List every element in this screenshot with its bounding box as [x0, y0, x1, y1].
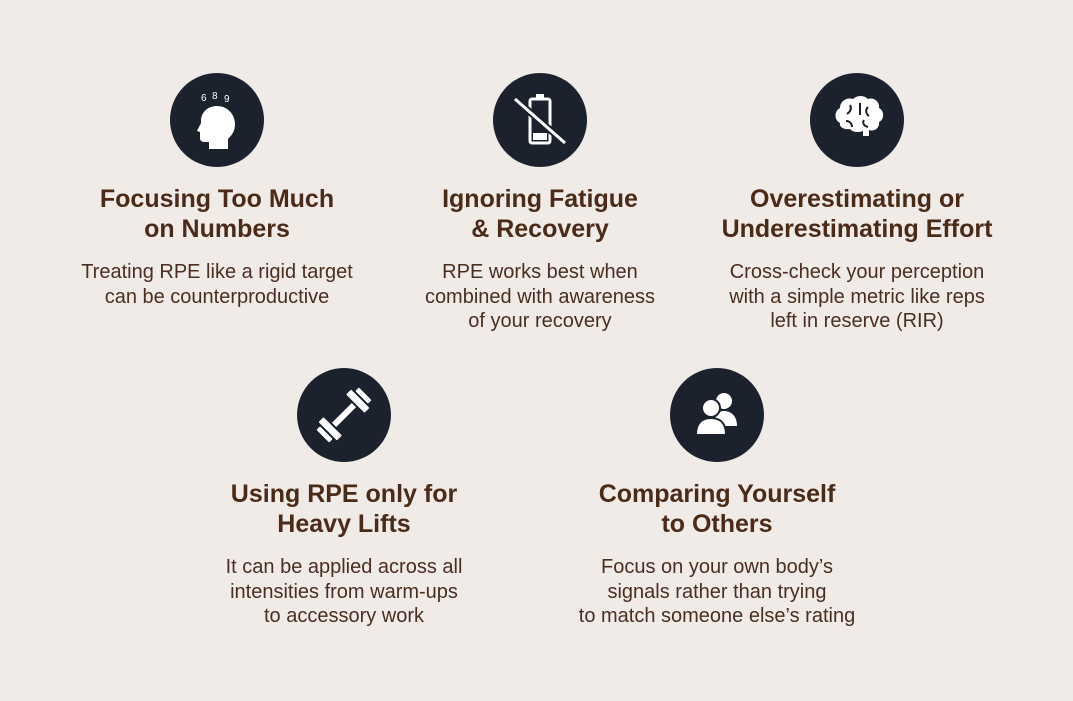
text	[81, 261, 353, 308]
heading: Focusing Too Much	[100, 185, 334, 213]
text: to match someone else’s rating	[579, 605, 855, 627]
text: to accessory work	[264, 605, 424, 627]
icon: dumbbell	[297, 368, 391, 462]
text: Treating RPE like a rigid target	[81, 261, 353, 283]
heading: Using RPE only for	[231, 480, 457, 508]
icon: brain	[810, 73, 904, 167]
text: combined with awareness	[425, 286, 655, 308]
text: intensities from warm-ups	[230, 580, 458, 602]
heading	[599, 480, 836, 538]
icon: people	[670, 368, 764, 462]
text: left in reserve (RIR)	[770, 310, 944, 332]
text: Focus on your own body’s	[601, 556, 833, 578]
text	[729, 261, 985, 332]
text	[579, 556, 855, 627]
text: signals rather than trying	[607, 580, 826, 602]
heading	[100, 185, 334, 243]
item: heavy lifts	[226, 480, 462, 627]
heading: to Others	[661, 510, 773, 538]
text	[425, 261, 655, 332]
heading: Ignoring Fatigue	[442, 185, 638, 213]
text: It can be applied across all	[226, 556, 462, 578]
item: overestimating	[722, 185, 992, 332]
item: comparing	[579, 480, 855, 627]
item: ignoring fatigue	[425, 185, 655, 332]
heading: Comparing Yourself	[599, 480, 835, 508]
icon: battery crossed	[493, 73, 587, 167]
item: focusing too much on numbers	[81, 185, 353, 308]
icon: head with numbers: 6	[201, 93, 207, 104]
text: can be counterproductive	[105, 286, 329, 308]
text: of your recovery	[468, 310, 612, 332]
text	[226, 556, 462, 627]
icon: head with numbers: 9	[224, 94, 230, 105]
text: with a simple metric like reps	[729, 286, 985, 308]
icon: head with numbers: 8	[212, 91, 218, 102]
icon: head with numbers	[170, 73, 264, 167]
heading	[231, 480, 457, 538]
text: Cross-check your perception	[730, 261, 984, 283]
heading: Underestimating Effort	[722, 215, 992, 243]
heading: & Recovery	[471, 215, 609, 243]
heading	[722, 185, 992, 243]
text: RPE works best when	[442, 261, 638, 283]
heading: Overestimating or	[750, 185, 964, 213]
heading	[442, 185, 638, 243]
heading: Heavy Lifts	[277, 510, 411, 538]
heading: on Numbers	[144, 215, 290, 243]
